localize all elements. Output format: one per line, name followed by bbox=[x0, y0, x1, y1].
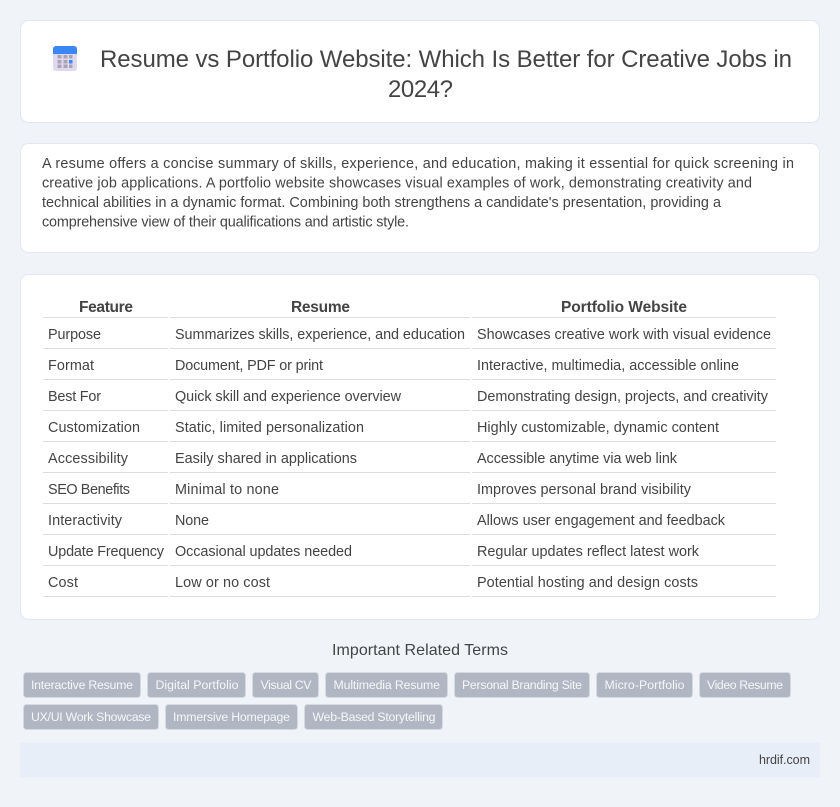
row: Customization: Static, limited personalization bbox=[175, 420, 364, 436]
tag: Micro-Portfolio: Micro-Portfolio bbox=[604, 678, 685, 692]
tag: Personal Branding Site bbox=[454, 672, 590, 698]
tag: Video Resume bbox=[700, 672, 790, 698]
panel: summary paragraph bbox=[20, 144, 820, 252]
row: Update Frequency: Regular updates reflect latest work bbox=[477, 544, 700, 560]
tags: related terms bbox=[24, 672, 790, 730]
row: Customization: Customization bbox=[48, 420, 140, 436]
tag: Multimedia Resume bbox=[326, 672, 448, 698]
tag: Video Resume: Video Resume bbox=[707, 678, 783, 692]
row: Cost bbox=[48, 575, 698, 591]
title: 2024? bbox=[388, 76, 453, 103]
row: Purpose bbox=[48, 327, 771, 343]
panel: summary paragraph: comprehensive view of their qualifications and artistic style. bbox=[42, 214, 409, 230]
row: Cost: Potential hosting and design costs bbox=[477, 575, 698, 591]
panel: summary paragraph: A resume offers a concise summary of skills, experience, and education, making it essential for quick screening in bbox=[42, 156, 794, 172]
row: Purpose: Showcases creative work with visual evidence bbox=[477, 327, 771, 343]
row: Interactivity: None bbox=[175, 513, 209, 529]
tag: Digital Portfolio bbox=[148, 672, 246, 698]
icon: calendar bbox=[53, 46, 77, 71]
row: Format: Format bbox=[48, 358, 94, 374]
tag: Digital Portfolio: Digital Portfolio bbox=[156, 678, 239, 692]
row: Update Frequency bbox=[48, 544, 700, 560]
title: Resume vs Portfolio Website: Which Is Better for Creative Jobs in bbox=[100, 46, 792, 73]
footer bbox=[20, 743, 820, 777]
row: SEO Benefits: SEO Benefits bbox=[48, 482, 130, 498]
row: SEO Benefits: Minimal to none bbox=[175, 482, 279, 498]
row: Accessibility bbox=[48, 451, 678, 467]
row: Interactivity bbox=[48, 513, 726, 529]
row: Accessibility: Accessible anytime via web link bbox=[477, 451, 678, 467]
row: Update Frequency: Occasional updates needed bbox=[175, 544, 352, 560]
row: Interactivity: Interactivity bbox=[48, 513, 123, 529]
tag: Multimedia Resume: Multimedia Resume bbox=[334, 678, 440, 692]
table header: Portfolio Website bbox=[561, 299, 687, 316]
row: SEO Benefits bbox=[48, 482, 692, 498]
row: Format: Interactive, multimedia, accessible online bbox=[477, 358, 739, 374]
row: Best For bbox=[48, 389, 769, 405]
tag: UX/UI Work Showcase bbox=[24, 704, 158, 730]
title panel bbox=[20, 20, 820, 122]
tag: Visual CV: Visual CV bbox=[260, 678, 312, 692]
tag: UX/UI Work Showcase: UX/UI Work Showcase bbox=[31, 710, 151, 724]
tag: Personal Branding Site: Personal Branding Site bbox=[462, 678, 582, 692]
title bbox=[100, 46, 792, 103]
tag: Immersive Homepage: Immersive Homepage bbox=[173, 710, 290, 724]
table header: Resume bbox=[291, 299, 350, 316]
row: Best For: Demonstrating design, projects, and creativity bbox=[477, 389, 769, 405]
tag: Web-Based Storytelling: Web-Based Storytelling bbox=[312, 710, 436, 724]
tag: Interactive Resume: Interactive Resume bbox=[31, 678, 133, 692]
row: Purpose: Purpose bbox=[48, 327, 101, 343]
panel: comparison table bbox=[20, 274, 820, 620]
footer: hrdif.com bbox=[759, 753, 810, 767]
tag: Micro-Portfolio bbox=[596, 672, 692, 698]
row: Best For: Best For bbox=[48, 389, 101, 405]
row: Format: Document, PDF or print bbox=[175, 358, 323, 374]
tag: Visual CV bbox=[252, 672, 318, 698]
table header: Feature bbox=[79, 299, 133, 316]
row: Update Frequency: Update Frequency bbox=[48, 544, 165, 560]
panel: summary paragraph: technical abilities in a dynamic format. Combining both strengthens a candidate's presentation, providing a bbox=[42, 195, 721, 211]
table header bbox=[79, 299, 687, 316]
row: Customization bbox=[48, 420, 719, 436]
row: Cost: Cost bbox=[48, 575, 78, 591]
tag: Web-Based Storytelling bbox=[304, 704, 442, 730]
row: Accessibility: Easily shared in applications bbox=[175, 451, 357, 467]
row: Accessibility: Accessibility bbox=[48, 451, 129, 467]
tag: Immersive Homepage bbox=[166, 704, 298, 730]
row: SEO Benefits: Improves personal brand visibility bbox=[477, 482, 692, 498]
row: Format bbox=[48, 358, 739, 374]
row: Customization: Highly customizable, dynamic content bbox=[477, 420, 719, 436]
tag: Interactive Resume bbox=[24, 672, 140, 698]
panel: summary paragraph: creative job applications. A portfolio website showcases visual examples of work, demonstrating creativity and bbox=[42, 176, 752, 192]
row: Purpose: Summarizes skills, experience, and education bbox=[175, 327, 465, 343]
row: Interactivity: Allows user engagement and feedback bbox=[477, 513, 726, 529]
row: Cost: Low or no cost bbox=[175, 575, 270, 591]
row: Best For: Quick skill and experience overview bbox=[175, 389, 402, 405]
heading: related terms: Important Related Terms bbox=[332, 642, 508, 659]
